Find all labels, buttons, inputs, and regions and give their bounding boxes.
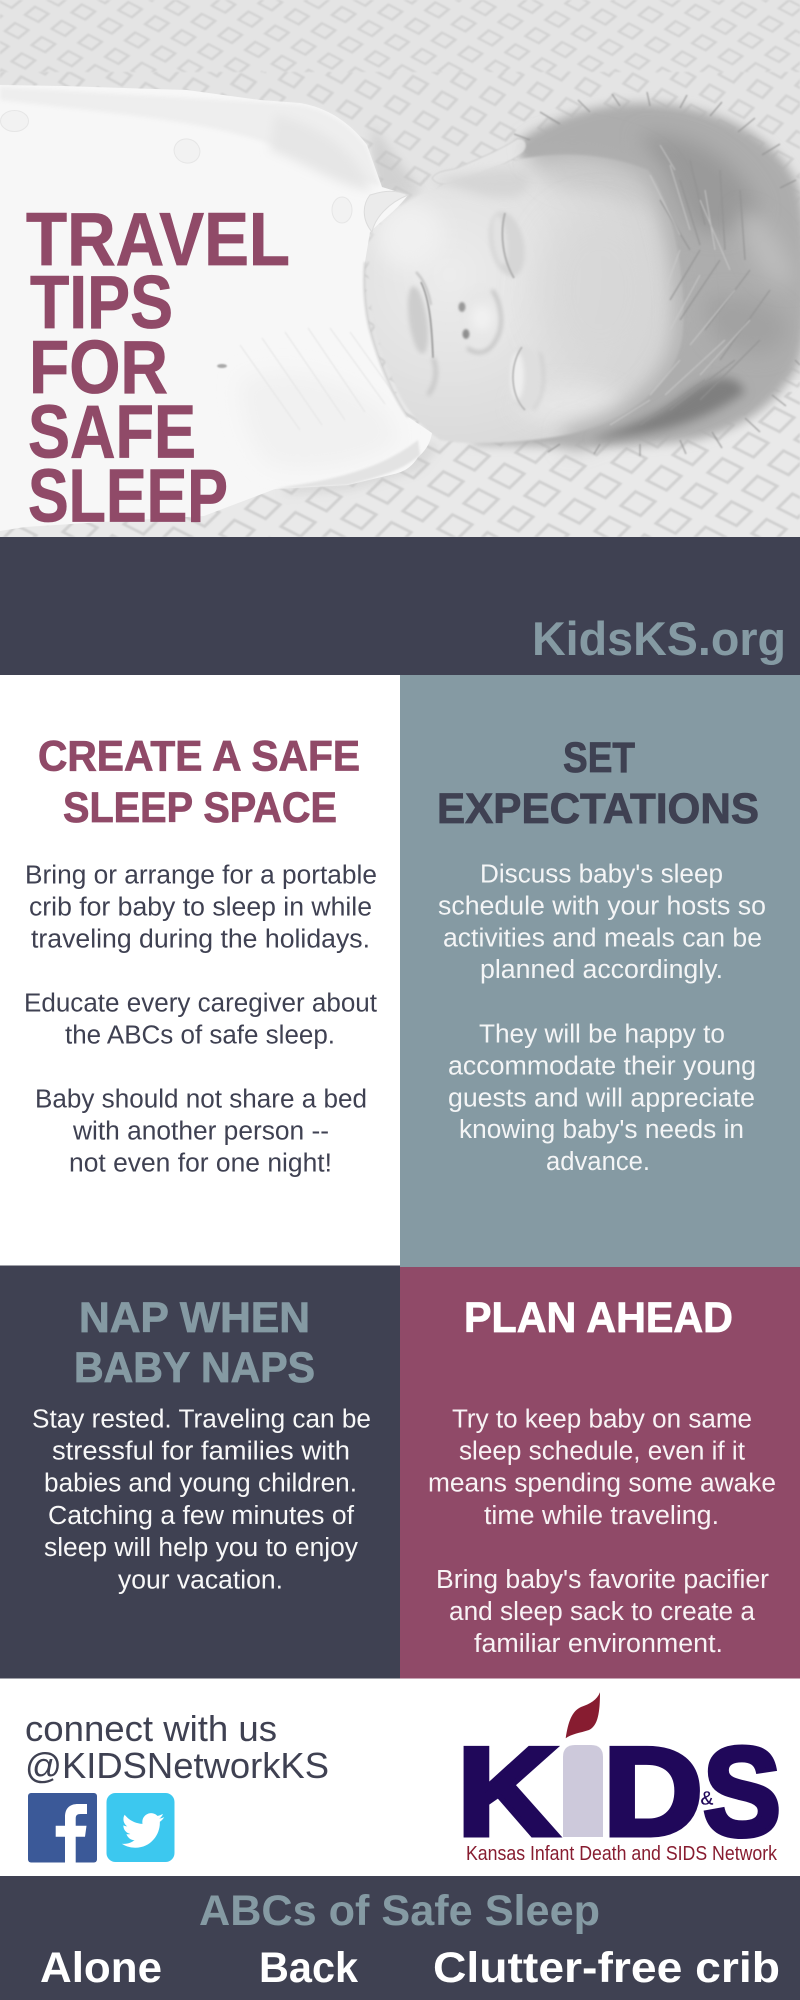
body text: nap when baby naps: sleep will help you to enjoy [44,1534,358,1562]
logo letters: D [603,1721,703,1862]
heading: create a safe sleep space: CREATE A SAFE [38,732,360,780]
mouth [404,272,436,395]
baby's hair [470,103,800,446]
logo letters: K [457,1721,558,1862]
heading: nap when baby naps [74,1294,315,1392]
body text: plan ahead: time while traveling. [484,1502,719,1530]
heading: ABCs of safe sleep: ABCs of Safe Sleep [199,1887,600,1935]
baby's face [369,154,684,443]
panel: plan ahead [400,1267,800,1678]
body text: set expectations: schedule with your hosts so [438,892,766,920]
website address: KidsKS.org [532,612,786,665]
body text: plan ahead [428,1406,776,1658]
panel: set expectations [400,675,800,1267]
body text: nap when baby naps: babies and young children. [44,1470,357,1498]
crib sheet with diamond pattern [0,0,800,537]
heading: set expectations: SET [563,734,635,782]
body text: set expectations: They will be happy to [479,1020,725,1048]
body text: create a safe sleep space: the ABCs of safe sleep. [65,1022,335,1050]
title: TIPS [30,260,173,344]
body text: set expectations: knowing baby's needs in [459,1116,744,1144]
body text: set expectations: Discuss baby's sleep [480,860,723,888]
body text: nap when baby naps [32,1406,371,1594]
title [26,197,290,538]
body text: plan ahead: familiar environment. [474,1630,723,1658]
logo ampersand: & [700,1788,714,1810]
heading: nap when baby naps: NAP WHEN [79,1294,310,1342]
body text: plan ahead: Try to keep baby on same [452,1406,752,1434]
heading: create a safe sleep space: SLEEP SPACE [63,784,337,832]
body text: set expectations: planned accordingly. [480,956,723,984]
body text: set expectations: accommodate their young [448,1052,756,1080]
icon: facebook [28,1793,97,1862]
title: FOR [29,325,168,409]
body text: create a safe sleep space: Baby should not share a bed [35,1086,367,1114]
title: SAFE [28,390,196,474]
social handle text: @KIDSNetworkKS [25,1745,329,1786]
ABC: back: Back [259,1944,358,1992]
panel: ABCs of safe sleep [0,1876,800,2000]
logo: KIDS network [457,1692,781,1865]
baby's hand by the head [432,139,526,184]
body text: plan ahead: means spending some awake [428,1470,776,1498]
logo flame [566,1692,600,1738]
ABC: clutter-free crib: Clutter-free crib [433,1944,780,1992]
title: TRAVEL [26,197,290,281]
heading: plan ahead: PLAN AHEAD [464,1294,733,1342]
body text: set expectations: advance. [546,1148,650,1176]
snap buttons [0,110,352,223]
logo candle [563,1745,603,1837]
heading: set expectations: EXPECTATIONS [437,785,759,833]
body text: plan ahead: Bring baby's favorite pacifier [436,1566,770,1594]
logo letters [457,1721,781,1862]
body text: nap when baby naps: Catching a few minutes of [48,1502,355,1530]
panel: create a safe sleep space [0,675,400,1266]
closed eye, lower [512,346,544,411]
body text: nap when baby naps: stressful for families with [52,1438,350,1466]
body text: plan ahead: and sleep sack to create a [449,1598,756,1626]
body text: create a safe sleep space: crib for baby to sleep in while [29,894,372,922]
panel: nap when baby naps [0,1266,400,1678]
body text: create a safe sleep space: not even for one night! [69,1150,332,1178]
website band [0,537,800,675]
body text: set expectations [438,860,766,1176]
ABC: alone: Alone [40,1944,162,1992]
closed eye, upper [489,212,524,279]
body text: set expectations: activities and meals can be [443,924,762,952]
social handle text [25,1708,329,1786]
body text: nap when baby naps: your vacation. [118,1566,283,1594]
heading: nap when baby naps: BABY NAPS [74,1344,315,1392]
heading: create a safe sleep space [38,732,360,832]
heading: set expectations [437,734,759,833]
hairline and hair strands over the face [514,92,800,456]
title: SLEEP [28,454,228,538]
social handle text: connect with us [25,1708,277,1749]
body text: nap when baby naps: Stay rested. Traveling can be [32,1406,371,1434]
body text: create a safe sleep space: Bring or arrange for a portable [25,862,377,890]
body text: create a safe sleep space: Educate every caregiver about [24,990,377,1018]
body text: plan ahead: sleep schedule, even if it [459,1438,745,1466]
body text: create a safe sleep space: traveling during the holidays. [31,926,370,954]
body text: create a safe sleep space: with another person -- [72,1118,329,1146]
body text: set expectations: guests and will appreciate [448,1084,755,1112]
sleep sack [0,85,432,531]
logo letters: S [703,1722,781,1862]
body text: create a safe sleep space [24,862,377,1178]
nose [457,288,504,356]
icon: twitter [106,1793,174,1862]
hero photo: sleeping baby [0,0,800,538]
